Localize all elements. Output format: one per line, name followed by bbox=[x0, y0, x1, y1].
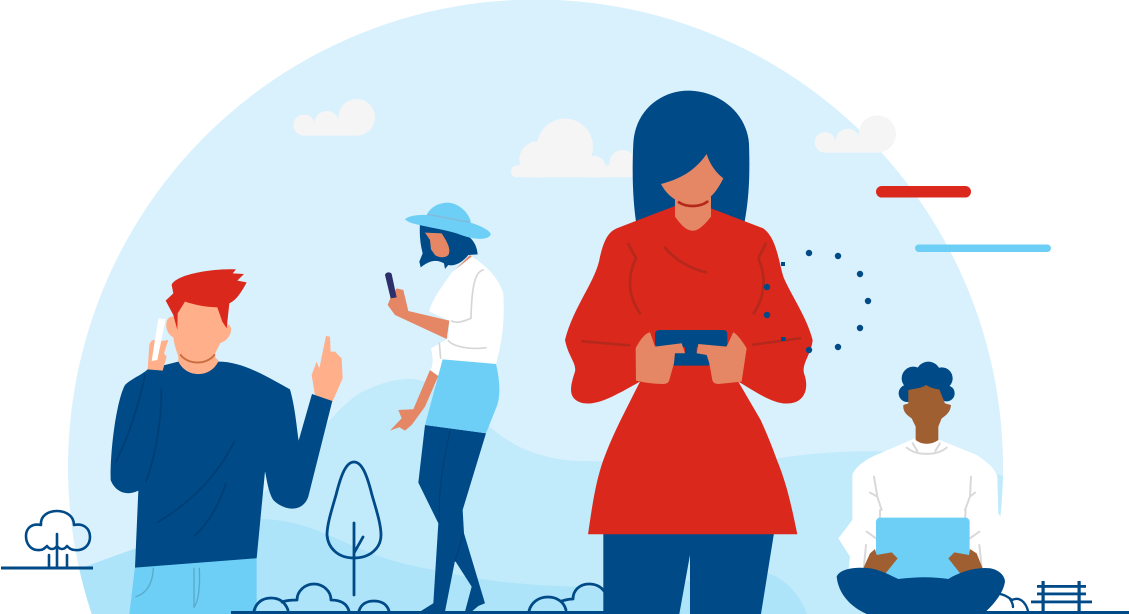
woman with hat: face bbox=[425, 233, 449, 257]
person: woman in red dress bbox=[565, 91, 813, 614]
seated man: hair bbox=[899, 362, 955, 402]
light blue accent bar bbox=[915, 244, 1051, 252]
seated man: hands bbox=[863, 549, 983, 573]
cloud: centre bbox=[511, 119, 636, 181]
seated man: face and neck bbox=[903, 385, 951, 444]
man: neck and face bbox=[166, 300, 231, 375]
woman with hat: skirt bbox=[425, 359, 499, 433]
tall tree bbox=[327, 462, 381, 595]
man: sweater bbox=[111, 362, 332, 568]
woman with hat: phone bbox=[385, 272, 397, 298]
woman in red: phone bbox=[655, 330, 727, 366]
seated man: crossed legs bbox=[837, 568, 1005, 614]
bench bbox=[1031, 581, 1092, 612]
woman with hat: shirt bbox=[429, 257, 504, 376]
seated man: shirt bbox=[838, 438, 1017, 572]
woman with hat: lower arm bbox=[390, 370, 438, 431]
woman in red: dress bbox=[565, 206, 813, 534]
person: woman with hat bbox=[385, 203, 504, 612]
hills bbox=[70, 379, 1010, 614]
person: man on the phone bbox=[111, 269, 343, 614]
red accent bar bbox=[876, 186, 971, 198]
woman with hat: hair bbox=[419, 223, 478, 269]
bush group: left bbox=[254, 584, 389, 611]
woman with hat: raised arm bbox=[388, 288, 449, 339]
cloud: left bbox=[293, 99, 375, 136]
man: raised hand bbox=[312, 336, 343, 402]
man: hair bbox=[166, 269, 247, 330]
man: trousers bbox=[129, 558, 257, 614]
woman with hat: trousers bbox=[418, 425, 486, 612]
cloud: right bbox=[815, 115, 896, 153]
woman with hat: hat bbox=[405, 203, 491, 239]
person: seated man with tablet bbox=[837, 362, 1017, 614]
woman in red: hands bbox=[636, 332, 747, 384]
man: hand holding phone bbox=[148, 340, 168, 371]
man: phone bbox=[152, 318, 166, 361]
woman in red: dress folds bbox=[582, 244, 800, 345]
bush: right bbox=[1000, 594, 1028, 611]
woman with hat: neck bbox=[452, 255, 475, 273]
small tree on the left bbox=[1, 511, 93, 570]
woman in red: hair bbox=[633, 91, 749, 223]
bush group: centre bbox=[529, 584, 604, 611]
seated man: tablet bbox=[876, 518, 970, 583]
woman in red: neck and face bbox=[661, 154, 723, 231]
dotted loading ring bbox=[764, 250, 871, 353]
woman in red: trousers bbox=[603, 533, 774, 614]
ground line bbox=[231, 611, 1129, 614]
